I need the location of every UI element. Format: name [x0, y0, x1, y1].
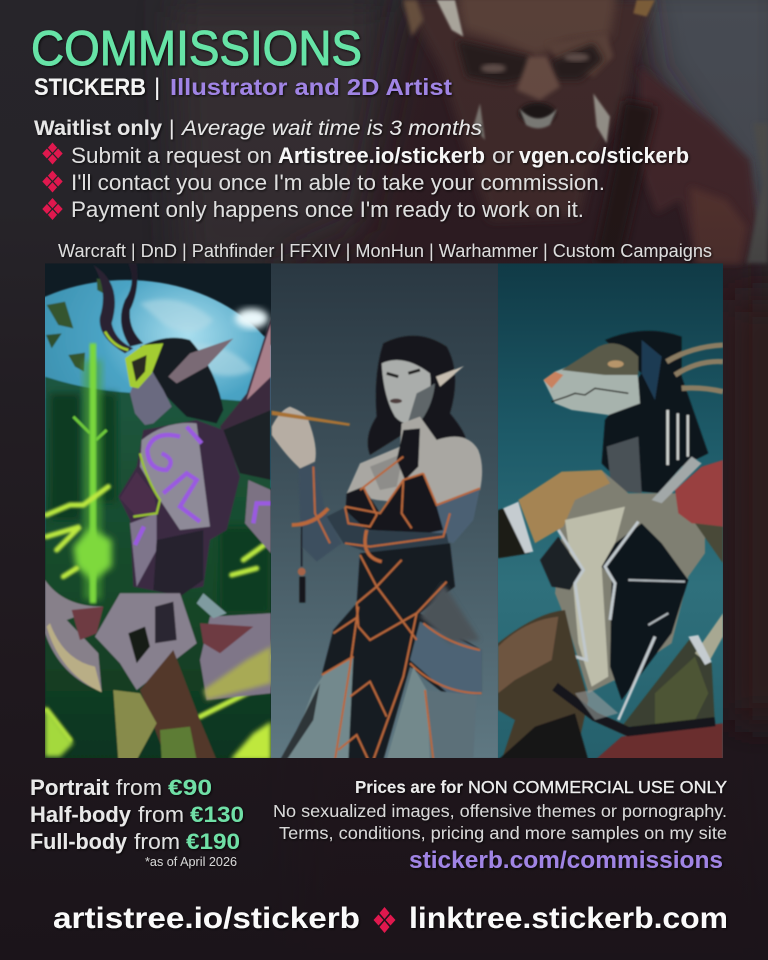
pricing list [30, 775, 244, 869]
terms block [273, 777, 727, 843]
panel: elf naga woman illustration [271, 263, 498, 760]
figure: arm at right [245, 480, 271, 553]
step 1 text: Artistree.io/stickerb [278, 143, 485, 168]
hair [368, 336, 467, 467]
floating rocks [47, 302, 73, 328]
price: portrait: €90 [168, 775, 212, 800]
sleeve and hand [298, 463, 342, 562]
price: portrait: from [116, 775, 162, 800]
footer links [53, 902, 728, 935]
fel lightning [47, 487, 271, 740]
icon: red diamond separator [374, 907, 396, 933]
waitlist line: Waitlist only [34, 117, 162, 140]
figure: horns [93, 265, 133, 353]
step 1 text: vgen.co/stickerb [519, 143, 689, 168]
skirt [322, 543, 482, 760]
list: commission steps [42, 142, 689, 222]
link: artistree: artistree.io/stickerb [53, 902, 360, 935]
terms block: Prices are for [355, 777, 463, 797]
subtitle: Illustrator and 2D Artist [170, 74, 452, 100]
price: half-body: Half-body [30, 802, 132, 827]
figure: glaive [45, 580, 103, 692]
neck [607, 437, 642, 493]
step 1 text [71, 143, 689, 168]
head [543, 367, 642, 416]
icon: red diamond bullet [42, 142, 63, 164]
horns [667, 345, 723, 392]
subtitle: | [154, 74, 160, 101]
lower hips [498, 610, 588, 760]
price: full-body: Full-body [30, 829, 128, 854]
hair [602, 331, 708, 493]
hair strips [666, 410, 689, 465]
waitlist line: Average wait time is 3 months [180, 117, 483, 140]
price: full-body: €190 [186, 829, 240, 854]
step 1 text: Submit a request on [71, 143, 272, 168]
figure: torso [118, 420, 240, 593]
subtitle: STICKERB [34, 74, 146, 101]
terms block: NON COMMERCIAL USE ONLY [468, 777, 727, 797]
link: commissions page: stickerb.com/commissions [409, 847, 723, 874]
icon: red diamond bullet [42, 198, 63, 220]
chest and shoulder [518, 470, 705, 693]
arm left [498, 505, 530, 558]
price: half-body: from [138, 802, 184, 827]
terms block: No sexualized images, offensive themes or pornography. [273, 801, 727, 821]
neck and shoulders [347, 417, 482, 507]
orange trim [292, 457, 482, 760]
title: COMMISSIONS [31, 22, 362, 76]
panel: dragonborn woman illustration [498, 263, 723, 760]
figure: head and hair [140, 338, 223, 423]
panel: night elf demon hunter illustration [45, 264, 271, 758]
subtitle [34, 74, 452, 101]
step 3 text: Payment only happens once I'm ready to work on it. [71, 197, 584, 222]
figure: legs [140, 650, 217, 760]
price: half-body [30, 802, 244, 827]
step 1 text: or [492, 143, 514, 168]
face [382, 360, 431, 423]
dark armor [540, 537, 582, 590]
terms block: Terms, conditions, pricing and more samples on my site [279, 823, 727, 843]
planet [45, 278, 271, 536]
genres line: Warcraft | DnD | Pathfinder | FFXIV | MonHun | Warhammer | Custom Campaigns [58, 241, 712, 261]
price: portrait: Portrait [30, 775, 110, 800]
figure: purple runes [135, 427, 271, 545]
figure: wing [220, 317, 271, 477]
price date note: *as of April 2026 [145, 855, 237, 869]
waitlist line: | [169, 117, 174, 140]
icon: red diamond bullet [42, 170, 63, 192]
bodice [345, 473, 443, 533]
shoulder red pauldron [675, 460, 723, 527]
price: half-body: €130 [190, 802, 244, 827]
price: full-body [30, 829, 240, 854]
waitlist line [34, 117, 483, 140]
price: full-body: from [134, 829, 180, 854]
step 2 text: I'll contact you once I'm able to take your commission. [71, 170, 605, 195]
link: linktree: linktree.stickerb.com [409, 902, 728, 935]
price: portrait [30, 775, 212, 800]
green forest [45, 377, 271, 760]
fel beam [83, 360, 102, 600]
tassel [300, 527, 304, 567]
